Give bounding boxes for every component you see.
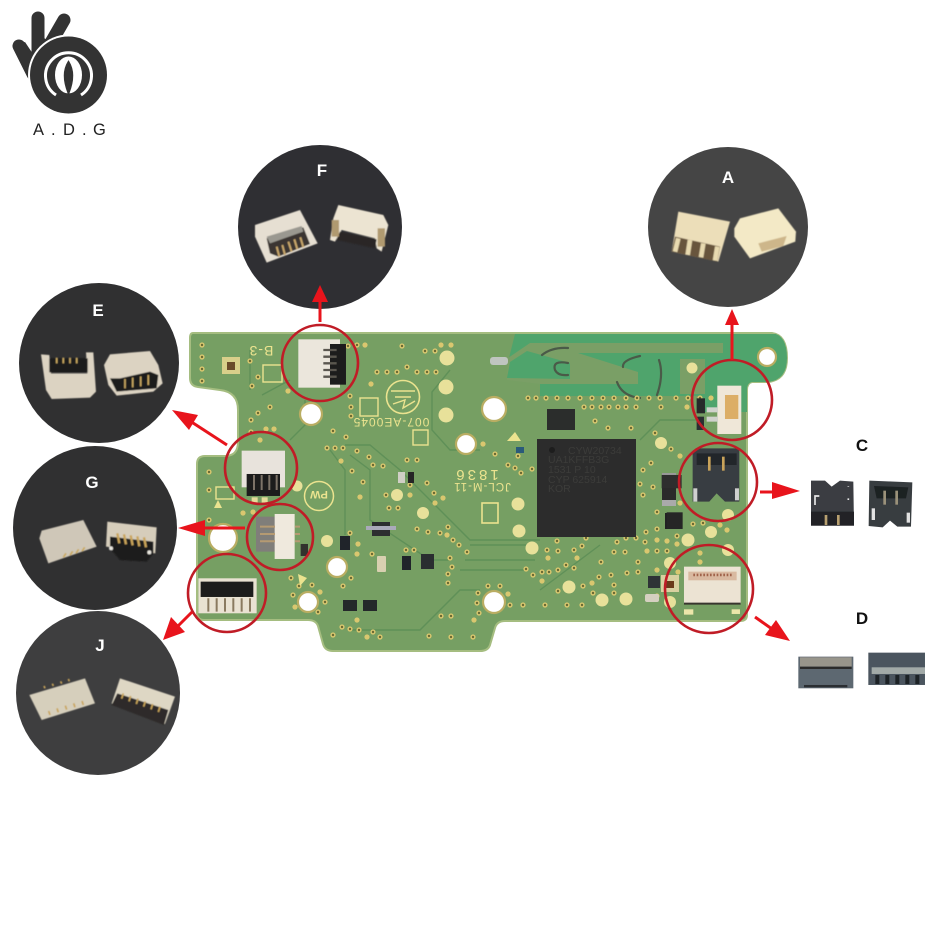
silkscreen markings: B-3 [249,343,273,359]
connector D parts [798,653,925,688]
silkscreen markings: 007-AE0045 [353,415,429,429]
connector G parts [39,520,157,563]
panel G: connector photo [13,446,177,610]
silkscreen markings [214,343,521,586]
silkscreen markings: JCL-M-11 [453,480,511,492]
connector J parts [29,678,175,725]
label A: A [722,168,734,187]
highlight circles on connectors [188,325,772,633]
board connector J [198,578,257,613]
silkscreen markings: 1836 [453,466,499,483]
silkscreen markings: PW [310,488,328,500]
main processor chip: CYP 625914 [548,474,608,486]
connector A parts [672,208,796,262]
board connector A [697,386,741,434]
label C: C [856,436,868,455]
main processor chip: KOR [548,483,571,495]
arrow to G [178,520,245,536]
arrow to C [760,482,800,499]
connector E parts [41,351,163,399]
board connector E [242,451,285,503]
logo text: A [33,121,44,139]
icon: hand gesture [13,18,109,116]
arrow to F [312,285,328,322]
logo text: D [63,121,75,139]
arrow to E [172,410,227,445]
connector F parts [255,205,388,263]
arrow to D [755,617,790,641]
arrow to J [163,612,192,640]
panel E: connector photo [19,283,179,443]
panel A: connector photo [648,147,808,307]
logo text: G [93,121,106,139]
panel F: connector photo [238,145,402,309]
board connector G [256,514,308,559]
arrow to A [725,309,739,360]
panel C: connector photo [811,436,912,527]
label G: G [85,473,99,492]
logo: A.D.G hand and eye [13,18,109,139]
label E: E [92,301,104,320]
mounting holes [209,348,776,613]
label J: J [95,636,105,655]
vias [202,345,727,637]
solder pads [292,350,734,608]
board connector C [662,448,739,529]
board connector F [298,339,346,388]
main processor chip [537,439,636,537]
label D: D [856,609,868,628]
logo text: . [82,121,87,139]
main processor chip: 1531 P 10 [548,464,596,476]
label F: F [317,161,327,180]
board outline [190,333,787,651]
small components [222,357,680,611]
copper traces [250,350,700,630]
main processor chip: CYW20734 [568,445,622,457]
connector C parts [811,481,912,527]
main processor chip: UA1KFFB3G [548,454,609,466]
panel D: connector photo [798,609,925,688]
antenna copper zone [507,334,790,412]
logo text: . [51,121,56,139]
board connector D [684,567,741,615]
panel J: connector photo [16,611,180,775]
circuit board [190,333,790,651]
